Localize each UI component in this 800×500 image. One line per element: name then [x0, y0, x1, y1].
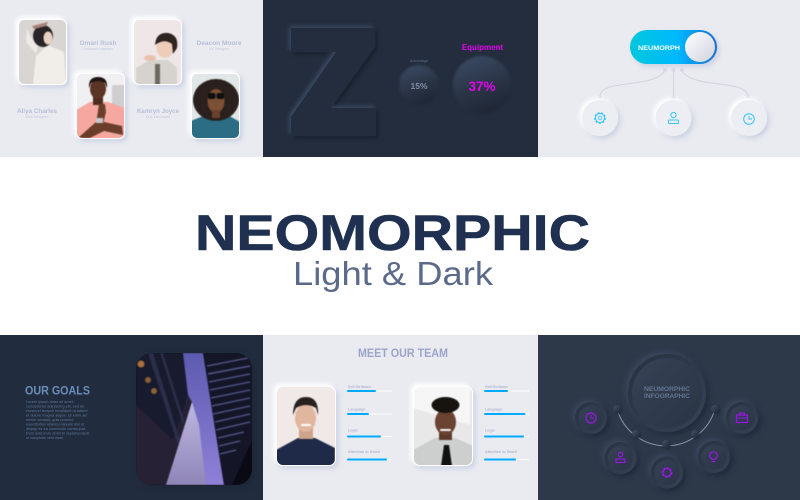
- sphere: Equipment 37%: 37%: [468, 79, 496, 94]
- building photo: [136, 353, 252, 485]
- label: Aliya Charles: Aliya Charles: [17, 108, 58, 115]
- team photo: man in navy shirt: [276, 386, 336, 466]
- label: Deacon Moore: UX Designer: [209, 47, 230, 51]
- sphere: Advantage 15%: [399, 59, 439, 105]
- panel: meet our team: [263, 335, 538, 500]
- sphere: Advantage 15%: 15%: [410, 81, 428, 91]
- title: [195, 205, 590, 292]
- photo card: woman in white: [18, 19, 67, 85]
- team photo: woman in grey blazer: [413, 386, 473, 466]
- central ring with label: NEUMORPHIC: [644, 386, 690, 393]
- central ring with label: [628, 354, 706, 432]
- body text: aliquip ex ea commodo consequat.: [26, 426, 86, 431]
- skill bars: left person: Attention to Detail: [348, 450, 380, 454]
- connector arrows: [600, 71, 748, 97]
- skill bars: left person: Self-Reliance: [348, 385, 371, 389]
- label: Deacon Moore: Deacon Moore: [196, 40, 242, 47]
- label: Omari Rush: Software Engineer: [83, 47, 114, 51]
- connecting arc: [613, 405, 719, 448]
- body text: Duis aute irure dolor in reprehenderit: [26, 430, 90, 436]
- sphere: Equipment 37%: Equipment: [462, 43, 503, 52]
- body text: eiusmod tempor incididunt ut labore: [26, 408, 88, 413]
- skill bars: right person: Self-Reliance: [485, 385, 508, 389]
- sphere: Advantage 15%: Advantage: [410, 59, 428, 63]
- heading: OUR GOALS: [25, 384, 90, 398]
- panel: dark letter and spheres: [263, 0, 538, 157]
- photo card: man with sunglasses: [191, 73, 240, 139]
- body text: in voluptate velit esse: [26, 435, 63, 440]
- label: Omari Rush: [80, 40, 117, 51]
- photo card: smiling woman: [133, 19, 182, 85]
- toggle switch: NEUMORPH: [638, 45, 680, 52]
- label: Omari Rush: Omari Rush: [80, 40, 117, 47]
- body text: Lorem ipsum dolor sit amet,: [26, 399, 74, 404]
- toggle switch: [630, 30, 717, 64]
- panel: our goals: [0, 335, 263, 500]
- skill bars: right person: [484, 385, 529, 460]
- icon node: briefcase: [726, 402, 758, 434]
- panel: neumorphic infographic wheel: [538, 335, 800, 500]
- sphere: Equipment 37%: [453, 43, 511, 114]
- icon node: clock: [575, 402, 607, 434]
- label: Deacon Moore: [196, 40, 242, 51]
- icon button: user: [656, 100, 692, 136]
- skill bars: left person: Language: [348, 408, 365, 412]
- body text: [26, 399, 90, 440]
- photo card: man in pink shirt: [76, 73, 125, 139]
- icon node: gear: [651, 456, 683, 488]
- label: Kamryn Joyce: [137, 108, 180, 119]
- central ring with label: INFOGRAPHIC: [644, 393, 690, 400]
- icon node: light bulb: [698, 441, 730, 473]
- heading: MEET OUR TEAM: [358, 346, 448, 360]
- panel: neumorph toggle diagram: [538, 0, 800, 157]
- subtitle: Light & Dark: [293, 255, 494, 292]
- skill bars: right person: Language: [485, 408, 502, 412]
- connector dots: [598, 68, 750, 99]
- body text: exercitation ullamco laboris nisi ut: [26, 422, 85, 426]
- label: Kamryn Joyce: Kamryn Joyce: [137, 108, 180, 115]
- icon node: user: [604, 442, 636, 474]
- embossed letter Z: [291, 28, 376, 136]
- body text: consectetur adipiscing elit, sed do: [26, 404, 84, 408]
- body text: et dolore magna aliqua. Ut enim ad: [26, 412, 87, 418]
- body text: minim veniam, quis nostrud: [26, 417, 73, 422]
- label: Aliya Charles: Web Designer: [26, 115, 49, 119]
- title: NEOMORPHIC: [195, 205, 590, 261]
- skill bars: right person: Attention to Detail: [485, 450, 517, 454]
- skill bars: left person: [347, 385, 392, 460]
- skill bars: right person: Logic: [485, 428, 495, 432]
- skill bars: left person: Logic: [348, 428, 358, 432]
- panel: team photo cards: [0, 0, 263, 157]
- label: Aliya Charles: [17, 108, 58, 119]
- icon button: clock: [731, 100, 767, 136]
- label: Kamryn Joyce: SQL Developer: [146, 115, 171, 119]
- icon button: gear: [582, 100, 618, 136]
